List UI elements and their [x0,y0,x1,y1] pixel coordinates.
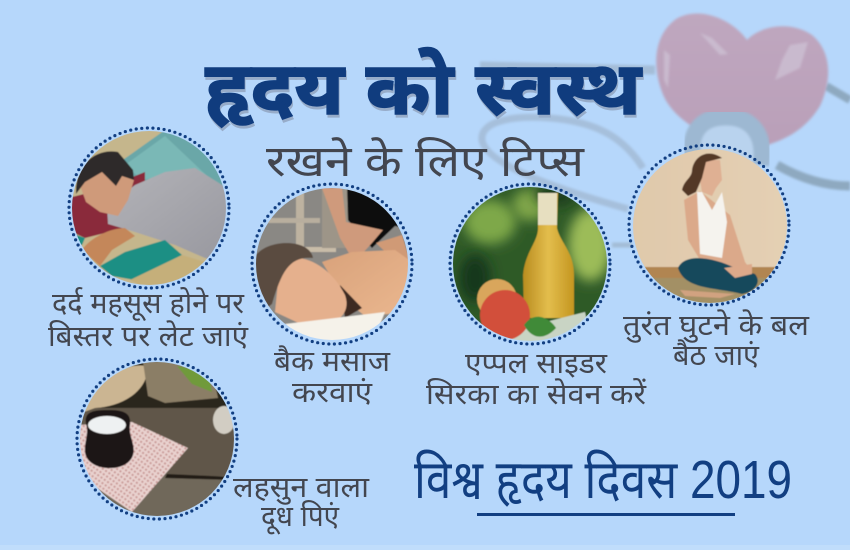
caption: kneel down: बैठ जाएं [673,339,760,372]
heading underline [477,513,735,516]
caption: apple cider vinegar: सिरका का सेवन करें [426,378,647,411]
caption: back massage [274,345,390,409]
photo: garlic milk [77,359,238,521]
subtitle: रखने के लिए टिप्स [266,136,585,186]
title: हृदय को स्वस्थ [206,50,643,133]
caption: back massage: करवाएं [292,377,373,409]
caption: lie on bed: दर्द महसूस होने पर [52,287,245,321]
caption: kneel down [623,309,810,372]
caption: back massage: बैक मसाज [274,345,390,378]
background image: heart and stethoscope [480,14,850,245]
photo: apple cider vinegar [450,184,612,345]
caption: garlic milk: दूध पिएं [261,500,340,535]
photo: back massage [250,184,415,345]
caption: kneel down: तुरंत घुटने के बल [623,309,810,343]
event heading: विश्व हृदय दिवस 2019 [414,449,792,510]
photo: woman kneeling [629,145,790,305]
photo: man lying on bed [68,128,232,290]
caption: lie on bed: बिस्तर पर लेट जाएं [48,320,249,353]
caption: apple cider vinegar [426,348,647,411]
caption: garlic milk [233,472,369,535]
caption: garlic milk: लहसुन वाला [233,472,369,505]
caption: lie on bed [48,287,249,353]
caption: apple cider vinegar: एप्पल साइडर [465,348,608,380]
title: हृदय को स्वस्थ [205,47,642,130]
